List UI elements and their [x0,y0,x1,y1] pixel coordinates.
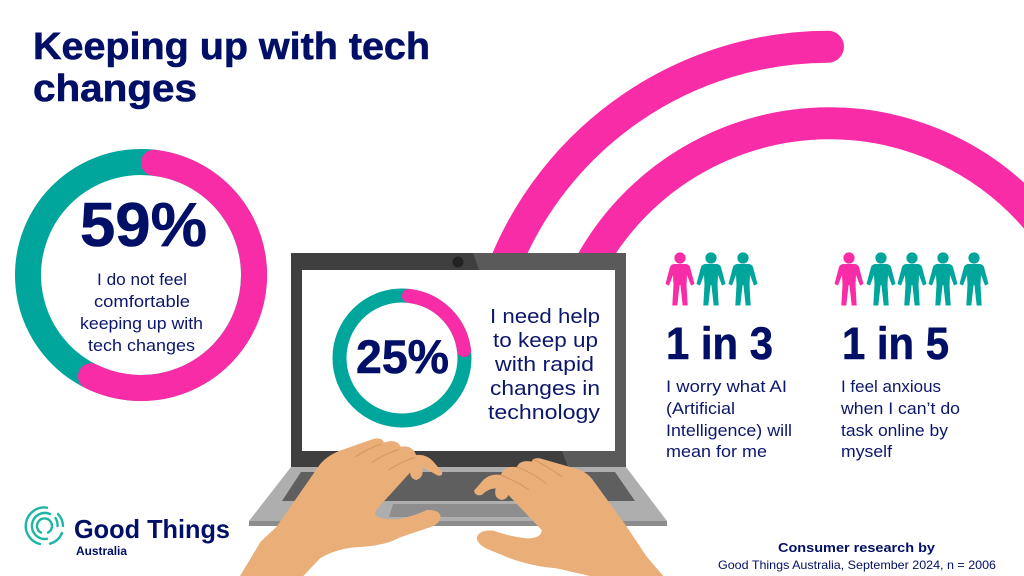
1 in 3 caption: (Artificial [666,399,735,418]
right hand [474,458,663,576]
people icons: 1 of 3 [666,252,758,306]
title: changes [33,68,197,110]
source credit: Consumer research by [778,540,936,555]
source credit [718,540,996,572]
icon: concentric rings [26,507,63,544]
1 in 5 caption: myself [841,442,892,461]
people icons: 1 of 5 [834,252,988,306]
25% caption: I need help [490,306,600,328]
59% caption [80,270,203,355]
1 in 3 caption: mean for me [666,442,767,461]
left hand [240,438,442,576]
laptop lid [291,253,626,467]
donut chart: 25 percent [340,296,464,420]
25% caption: technology [488,402,600,424]
donut chart: 59 percent [28,162,254,388]
logo sub-label: Australia [76,544,127,558]
25% caption: changes in [490,378,600,400]
1 in 5 heading: 1 in 5 [842,318,949,369]
1 in 3 caption: I worry what AI [666,377,787,396]
laptop base [249,467,667,526]
25% caption: with rapid [494,354,594,376]
25% caption [488,306,600,424]
panel: 59% donut [28,162,254,388]
laptop illustration [240,253,667,576]
25% number: 25% [356,330,449,383]
1 in 5 caption: when I can’t do [840,399,960,418]
59% caption: tech changes [88,336,195,355]
59% caption: I do not feel [97,270,187,289]
panel: 1 in 5 [834,252,988,461]
1 in 3 caption: Intelligence) will [666,421,792,440]
59% caption: keeping up with [80,314,203,333]
1 in 3 caption [666,377,792,461]
1 in 5 caption: task online by [841,421,949,440]
59% number: 59% [80,191,207,260]
logo: Good Things Australia [26,507,230,558]
1 in 3 heading: 1 in 3 [666,318,773,369]
25% caption: to keep up [493,330,598,352]
1 in 5 caption: I feel anxious [841,377,941,396]
logo wordmark: Good Things [74,514,230,544]
source credit: Good Things Australia, September 2024, n = 2006 [718,558,996,572]
panel: 1 in 3 [666,252,792,461]
title: Keeping up with tech [33,26,430,68]
59% caption: comfortable [94,292,190,311]
1 in 5 caption [840,377,960,461]
title [33,26,430,110]
decorative pink arcs [503,47,1024,270]
